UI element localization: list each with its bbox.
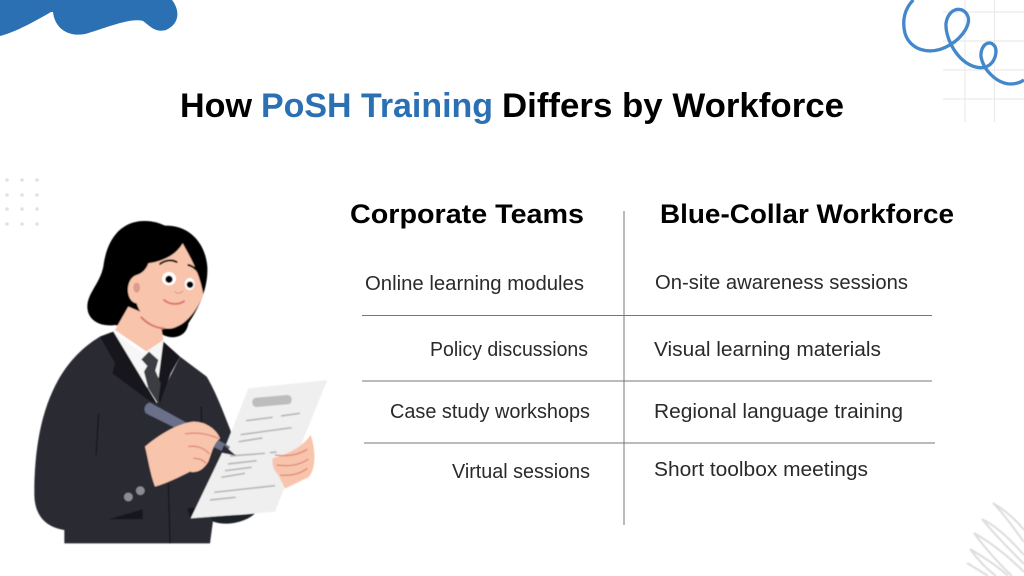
comparison table lines [362,211,935,525]
column heading: Corporate Teams: Corporate Teams [350,199,584,229]
corporate teams list [365,273,590,483]
writing hand [145,422,220,487]
title: PoSH Training [261,87,493,125]
eyes [162,272,195,290]
sleeve buttons [124,486,145,501]
lapels [100,332,180,403]
neck [115,307,163,352]
pen [145,403,236,456]
blue-collar workforce list [654,272,908,481]
decorative dot grid [5,178,39,226]
corporate teams list: Online learning modules [365,273,584,295]
blue-collar workforce list: On-site awareness sessions [655,272,908,294]
blue-collar workforce list: Visual learning materials [654,339,881,361]
title [180,87,844,125]
corporate teams list: Case study workshops [390,401,590,423]
fingers on paper [272,435,314,488]
jacket seams and pockets [96,407,202,543]
hair [87,221,207,337]
brows, nose and mouth [141,260,199,328]
arm behind the paper [210,513,255,524]
shirt collar [112,331,165,387]
decorative swirl and grid top right [904,0,1024,122]
decorative scribble bottom right [967,503,1024,576]
blue-collar workforce list: Regional language training [654,401,903,423]
title: Differs by Workforce [502,87,844,125]
tie [141,352,161,403]
corporate teams list: Virtual sessions [452,461,590,483]
column heading: Blue-Collar Workforce: Blue-Collar Workforce [660,199,954,229]
blue-collar workforce list: Short toolbox meetings [654,459,868,481]
ear [133,283,140,293]
face [128,243,203,329]
paper document [191,380,327,518]
corporate teams list: Policy discussions [430,339,588,361]
title: How [180,87,253,125]
jacket [34,332,232,543]
illustration: businesswoman reading a document with a pen [34,221,327,543]
decorative blue blob top left [0,0,177,36]
